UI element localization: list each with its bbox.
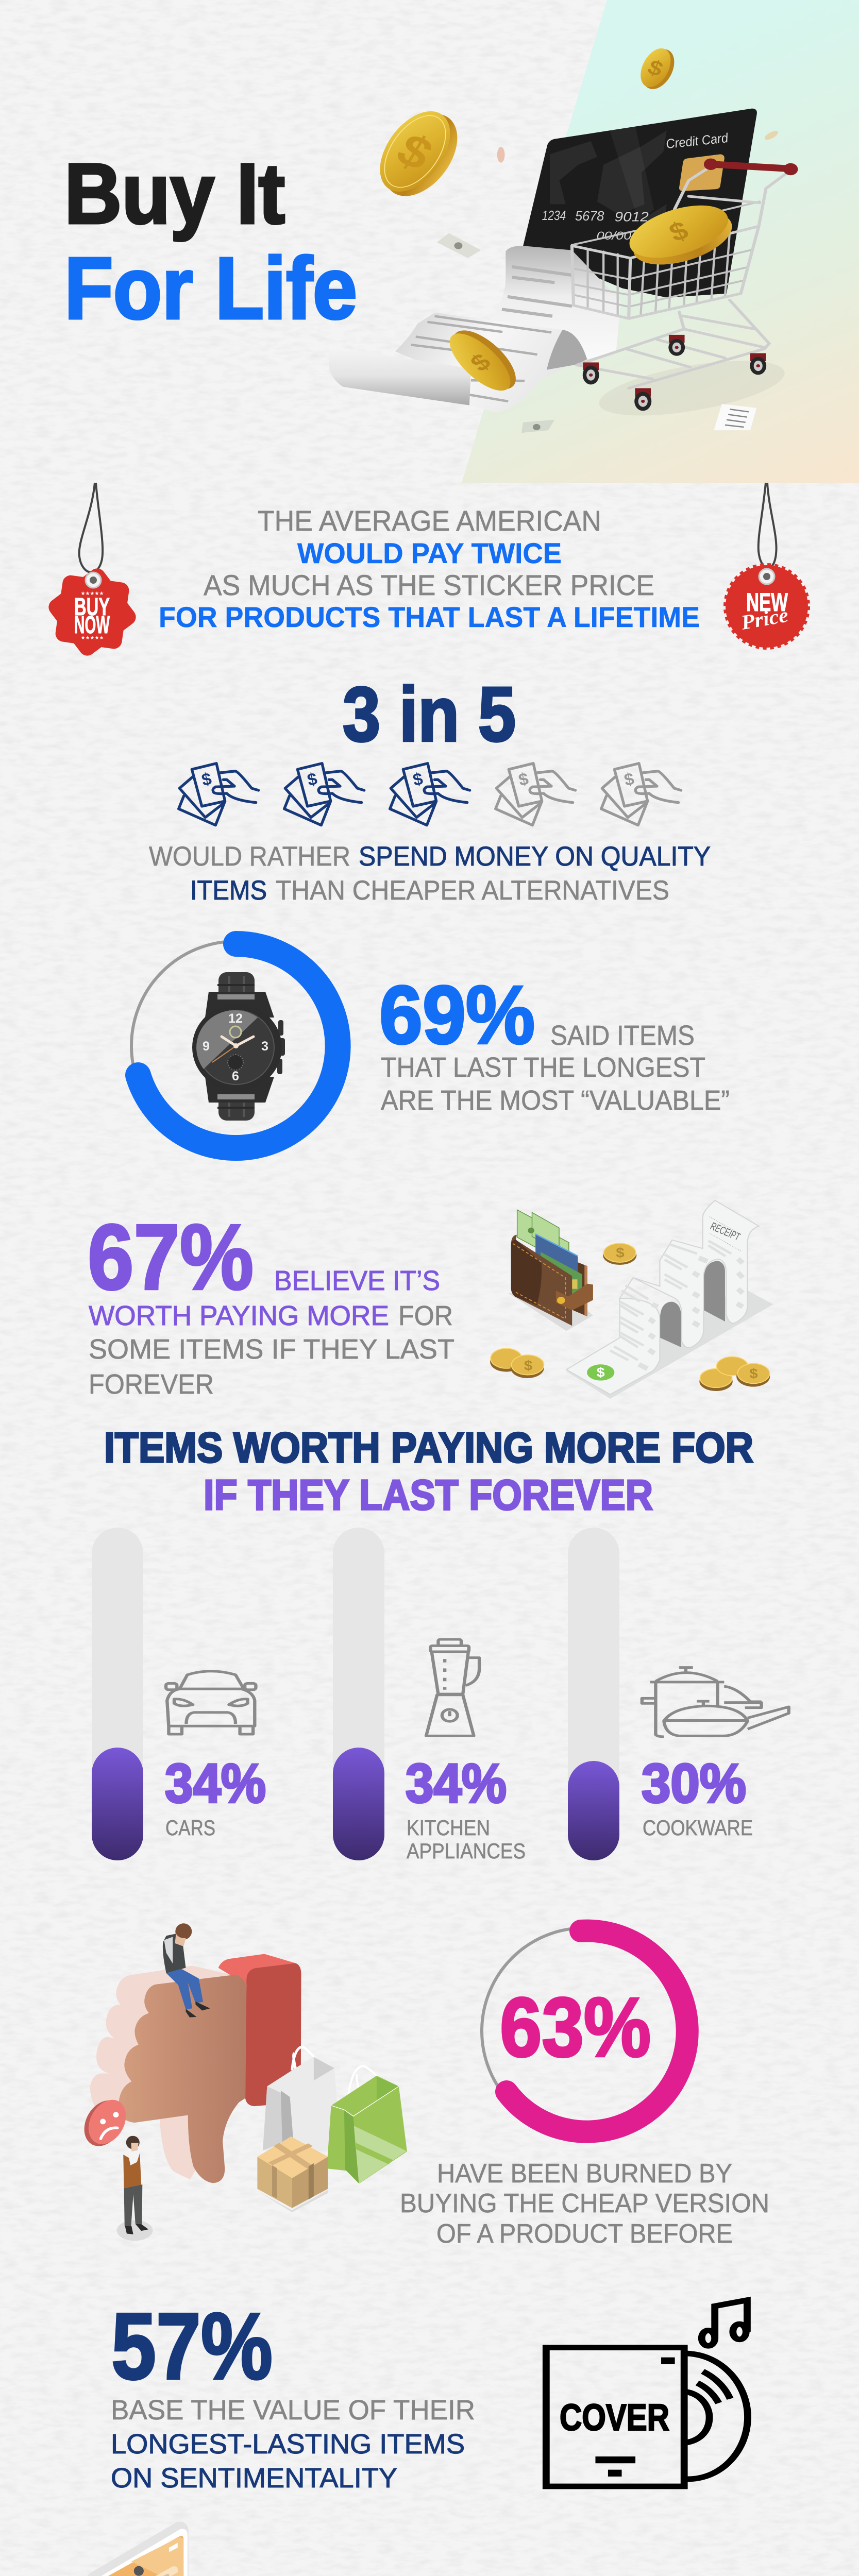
coins: $ [749, 1365, 758, 1381]
coin: top [634, 45, 680, 93]
illustration: thumbs down with shoppers [77, 1923, 407, 2241]
credit card: 00/00 [597, 230, 631, 243]
standing man [117, 2136, 153, 2241]
credit card: 9012 [615, 209, 649, 224]
intro text: FOR PRODUCTS THAT LAST A LIFETIME [159, 601, 700, 633]
phone [76, 2522, 194, 2576]
credit card: 5678 [575, 208, 604, 223]
stat: 69%: THAT LAST THE LONGEST [381, 1052, 705, 1083]
coin: large [364, 102, 473, 206]
shopping cart [572, 159, 798, 388]
bar: cars [92, 1528, 266, 1860]
coin: receipt: $ [464, 348, 496, 377]
cart wheels [583, 335, 766, 411]
icon: cookware [642, 1668, 789, 1737]
stat: 69% [379, 969, 730, 1116]
coins: $ [524, 1358, 533, 1373]
stat: 57%: 57% [111, 2293, 273, 2399]
wallet [508, 1210, 593, 1331]
credit card: Credit Card [665, 130, 730, 151]
stat: 57%: LONGEST-LASTING ITEMS [111, 2429, 465, 2460]
text: spend money on quality: THAN CHEAPER ALTERNATIVES [276, 875, 669, 906]
icon: vinyl record cover [546, 2300, 748, 2486]
bar: cars: 34% [165, 1752, 266, 1814]
stat: 69%: 69% [379, 969, 535, 1061]
stat: 57%: BASE THE VALUE OF THEIR [111, 2395, 475, 2426]
icon row: hands with money: $ [306, 769, 319, 790]
title: For Life [64, 240, 357, 337]
coins: $ [616, 1245, 625, 1260]
donut chart: 69% [131, 941, 341, 1150]
intro text [159, 504, 700, 633]
bar: kitchen appliances: 34% [406, 1752, 507, 1814]
stat: 63% [400, 1980, 769, 2249]
stat: 3 in 5: 3 in 5 [343, 671, 516, 757]
bar: kitchen appliances: APPLIANCES [407, 1839, 526, 1863]
intro text: THE AVERAGE AMERICAN [258, 504, 601, 537]
stat: 63%: OF A PRODUCT BEFORE [436, 2219, 733, 2249]
stat: 69%: SAID ITEMS [550, 1020, 695, 1051]
icon: vinyl record cover: COVER [560, 2397, 669, 2438]
stat: 63%: 63% [500, 1980, 651, 2074]
icon: watch: 3 [261, 1039, 268, 1054]
illustration: wallet, receipt and coins [490, 1200, 773, 1399]
section heading [104, 1423, 753, 1519]
text: spend money on quality: SPEND MONEY ON QUALITY [359, 841, 711, 872]
credit card: 1234 [542, 208, 566, 223]
tag: buy now: ★★★★★ [81, 635, 104, 641]
tag: buy now: ★★★★★ [81, 591, 104, 597]
stat: 67%: FOR [398, 1300, 453, 1331]
bar: cars: CARS [165, 1816, 215, 1840]
coin: receipt [440, 322, 527, 399]
illustration: phone store and woman on bean bag [76, 2522, 368, 2576]
icon: watch: 12 [228, 1011, 243, 1026]
stat: 67%: 67% [88, 1206, 254, 1309]
sitting man [163, 1923, 210, 2018]
shopping bags and box [257, 2047, 407, 2212]
stat: 63%: HAVE BEEN BURNED BY [437, 2159, 732, 2189]
stat: 67% [88, 1206, 454, 1400]
text: spend money on quality: WOULD RATHER [149, 841, 350, 872]
stat: 67%: FOREVER [89, 1369, 214, 1400]
bar: kitchen appliances [333, 1528, 526, 1863]
title: Buy It [64, 146, 285, 242]
coins [490, 1243, 770, 1391]
coin: cart [620, 195, 741, 276]
title [64, 146, 357, 337]
tag: new price [726, 483, 808, 648]
stat: 57% [111, 2293, 475, 2494]
sad face coin [77, 2093, 133, 2153]
tag: buy now: BUY [74, 594, 110, 621]
stat: 57%: ON SENTIMENTALITY [111, 2463, 397, 2494]
hero illustration: credit card, receipt, coins and shopping cart [329, 45, 798, 433]
icon: watch [192, 972, 285, 1121]
receipt: RECEIPT [708, 1220, 743, 1243]
icon row: hands with money [179, 764, 681, 825]
icon: car [166, 1671, 256, 1734]
icon row: hands with money: $ [200, 769, 213, 790]
icon: blender [426, 1639, 479, 1736]
bar: kitchen appliances: KITCHEN [407, 1816, 490, 1840]
stat: 69%: ARE THE MOST “VALUABLE” [381, 1085, 730, 1116]
receipt [566, 1200, 759, 1395]
receipt floor shadow [566, 1291, 773, 1399]
tag: buy now [39, 483, 146, 666]
bar: cookware [568, 1528, 753, 1860]
stat: 67%: SOME ITEMS IF THEY LAST [89, 1334, 454, 1365]
stat: 67%: BELIEVE IT’S [274, 1265, 440, 1296]
icon row: hands with money: $ [622, 769, 636, 790]
hero gradient panel [462, 0, 859, 483]
text: spend money on quality: ITEMS [190, 875, 267, 906]
intro text: WOULD PAY TWICE [297, 537, 562, 569]
floor shadow [594, 350, 790, 427]
icon row: hands with money: $ [411, 769, 425, 790]
icon: watch: 6 [232, 1069, 239, 1083]
coin: top: $ [644, 56, 666, 81]
tag: buy now: NOW [74, 612, 110, 639]
floating small coins and bills [437, 129, 780, 433]
stat: 67%: WORTH PAYING MORE [89, 1300, 389, 1331]
icon: watch: 9 [203, 1039, 210, 1054]
tag: new price: Price [739, 603, 790, 634]
credit card [523, 109, 757, 297]
thumb down hand [90, 1954, 301, 2183]
intro text: AS MUCH AS THE STICKER PRICE [204, 569, 654, 601]
bar: cookware: 30% [642, 1752, 746, 1814]
section heading: IF THEY LAST FOREVER [204, 1471, 653, 1519]
receipt: $ [597, 1365, 605, 1380]
bar: cookware: COOKWARE [643, 1816, 753, 1840]
receipt [329, 246, 621, 412]
icon row: hands with money: $ [517, 769, 530, 790]
tag: new price: NEW [746, 588, 788, 617]
donut chart: 63% [482, 1928, 688, 2134]
stat: 63%: BUYING THE CHEAP VERSION [400, 2189, 769, 2218]
coin: large: $ [388, 124, 442, 180]
coin: cart: $ [665, 216, 693, 247]
text: spend money on quality [149, 841, 711, 906]
section heading: ITEMS WORTH PAYING MORE FOR [104, 1423, 753, 1471]
